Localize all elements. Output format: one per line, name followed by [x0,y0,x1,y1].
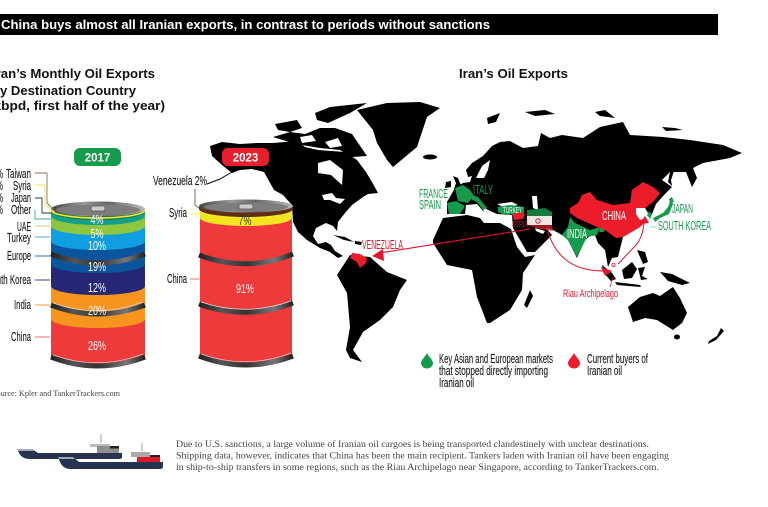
paragraph text: in ship-to-ship transfers in some regions, such as the Riau Archipelago near Singapore, according to TankerTrackers.com. [176,462,659,472]
heading: monthly oil exports [0,66,165,113]
legend text: stopped importing: Iranian oil [439,376,474,390]
labels: 2017 destinations: UAE [17,220,31,234]
barrel percentages: 19% [88,260,106,274]
legend text: current buyers [587,352,648,378]
barrel percentages: 5% [90,227,104,241]
barrel percentages [236,214,254,296]
labels: 2017 destinations: China [11,330,31,344]
ship one [17,434,122,459]
labels: 2023 destinations [153,174,207,286]
map: black landmasses [207,102,742,362]
map labels: Riau Archipelago [563,288,618,300]
leader lines: 2017 [35,173,55,337]
pill: 2023 [222,148,269,166]
map labels: ITALY [473,183,493,197]
world map [207,102,742,362]
map labels: VENEZUELA [362,238,403,252]
paragraph text [176,439,670,472]
icon: tanker ships [17,434,163,469]
barrel lid [199,200,293,212]
barrel percentages [88,213,106,353]
barrel hoops [199,254,293,365]
legend text: current buyers: Iranian oil [587,364,622,378]
icon: green drop [421,353,433,368]
barrel percentages: 4% [90,213,104,227]
labels: 2017 destinations: Japan [11,191,31,205]
barrel 2017 [51,202,145,366]
legend text: stopped importing: that stopped directly importing [439,364,548,378]
pill: 2017 [74,148,121,166]
barrel percentages: 26% [88,339,106,353]
icon: Iran flag country [527,208,553,231]
labels: 2023 destinations: Venezuela 2% [153,174,207,188]
map labels: CHINA [602,209,626,223]
route arrow: Iran to Venezuela [372,229,530,261]
labels: 2017 destinations: Other [11,203,31,217]
pill: 2017: 2017 [85,152,110,164]
title bar [0,14,718,35]
map: white Yellow Sea [636,208,648,220]
legend [421,352,648,390]
legend text: stopped importing: Key Asian and European markets [439,352,553,366]
map labels: FRANCE [419,187,448,201]
labels: 2017 destinations: Europe [7,249,31,263]
icon: red drop [568,353,580,368]
labels: 2017 destinations [0,167,31,344]
barrel lid [51,202,145,216]
map: red countries [350,182,660,268]
pill: 2023: 2023 [233,152,258,164]
legend text: stopped importing [439,352,553,390]
map labels: INDIA [567,227,587,241]
barrel percentages: 91% [236,282,254,296]
paragraph text: Due to U.S. sanctions, a large volume of Iranian oil cargoes is being transported clandestinely with unclear destinations. [176,439,649,449]
labels: 2023 destinations: Syria [169,206,187,220]
legend text: current buyers: Current buyers of [587,352,648,366]
route arrow: Iran to Riau [548,232,612,276]
labels: 2017 destinations: Taiwan [6,167,31,181]
map: green countries [447,185,674,257]
paragraph text: Shipping data, however, indicates that China has been the main recipient. Tankers laden with Iranian oil have been engaging [176,450,670,460]
labels: 2017 destinations: Syria [13,179,31,193]
barrel 2023 [199,200,293,365]
map labels [362,183,711,300]
map labels: TURKEY [503,206,522,215]
labels: 2017 destinations: India [14,298,31,312]
labels: 2017 destinations: Turkey [7,231,31,245]
map labels: JAPAN [672,202,693,216]
labels: 2023 destinations: China [167,272,187,286]
heading: Iran's oil exports map: Iran’s Oil Exports [459,66,568,81]
barrel percentages: 20% [88,304,106,318]
barrel hoops [51,254,145,366]
map labels: SPAIN [419,198,441,212]
barrel percentages: 10% [88,239,106,253]
barrel percentages: 7% [238,214,252,228]
map labels: SOUTH KOREA [658,219,711,233]
barrel percentages: 12% [88,281,106,295]
ship two [58,443,163,469]
map: white seas and lakes [300,135,545,234]
title bar: China buys almost all Iranian exports, in contrast to periods without sanctions [1,17,490,32]
route arrow: Riau to China [610,216,649,287]
map labels: SYRIA [512,220,528,229]
